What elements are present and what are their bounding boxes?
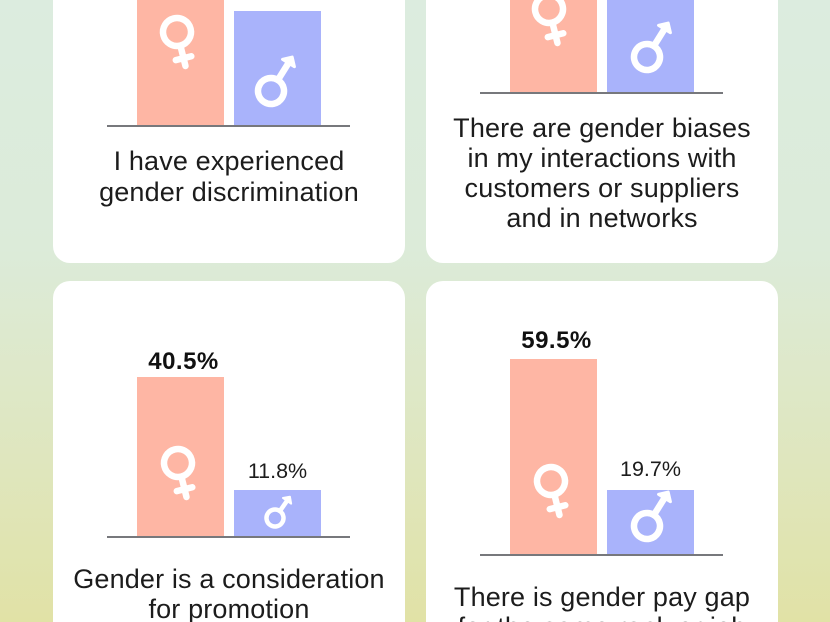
value: female 40.5%: 40.5% xyxy=(148,348,219,375)
caption xyxy=(99,146,359,207)
caption xyxy=(73,564,385,622)
icon: male top left xyxy=(253,50,303,109)
baseline xyxy=(480,92,723,94)
icon: female pay gap xyxy=(534,464,573,518)
bar: male xyxy=(607,0,694,93)
bar: male xyxy=(607,490,694,555)
baseline xyxy=(480,554,723,556)
bar: female xyxy=(510,359,597,555)
caption: I have experienced xyxy=(114,146,344,176)
bar: male xyxy=(234,11,321,126)
bar: female xyxy=(137,377,224,537)
value: female 59.5%: 59.5% xyxy=(521,327,592,354)
icon: male top right xyxy=(629,16,679,75)
icon: female top left xyxy=(160,15,199,69)
bar: male xyxy=(234,490,321,537)
caption: and in networks xyxy=(506,203,698,233)
caption: gender discrimination xyxy=(99,177,359,207)
panel: promotion xyxy=(53,281,405,622)
caption: There is gender pay gap xyxy=(454,582,750,612)
baseline xyxy=(107,536,350,538)
value: male 11.8%: 11.8% xyxy=(248,459,307,483)
bar: female xyxy=(137,0,224,126)
bar: female xyxy=(510,0,597,93)
panel: pay gap xyxy=(426,281,778,622)
caption: customers or suppliers xyxy=(465,173,739,203)
panel: gender discrimination experienced xyxy=(53,0,405,263)
caption xyxy=(453,113,751,233)
panel: gender biases in interactions xyxy=(426,0,778,263)
caption: There are gender biases xyxy=(453,113,751,143)
caption: in my interactions with xyxy=(467,143,737,173)
value: male 19.7%: 19.7% xyxy=(620,457,681,481)
icon: male pay gap xyxy=(629,485,679,544)
icon: female promotion xyxy=(161,446,200,500)
baseline xyxy=(107,125,350,126)
icon: male promotion xyxy=(263,492,297,530)
caption: Gender is a consideration xyxy=(73,564,385,594)
icon: female top right xyxy=(532,0,571,46)
